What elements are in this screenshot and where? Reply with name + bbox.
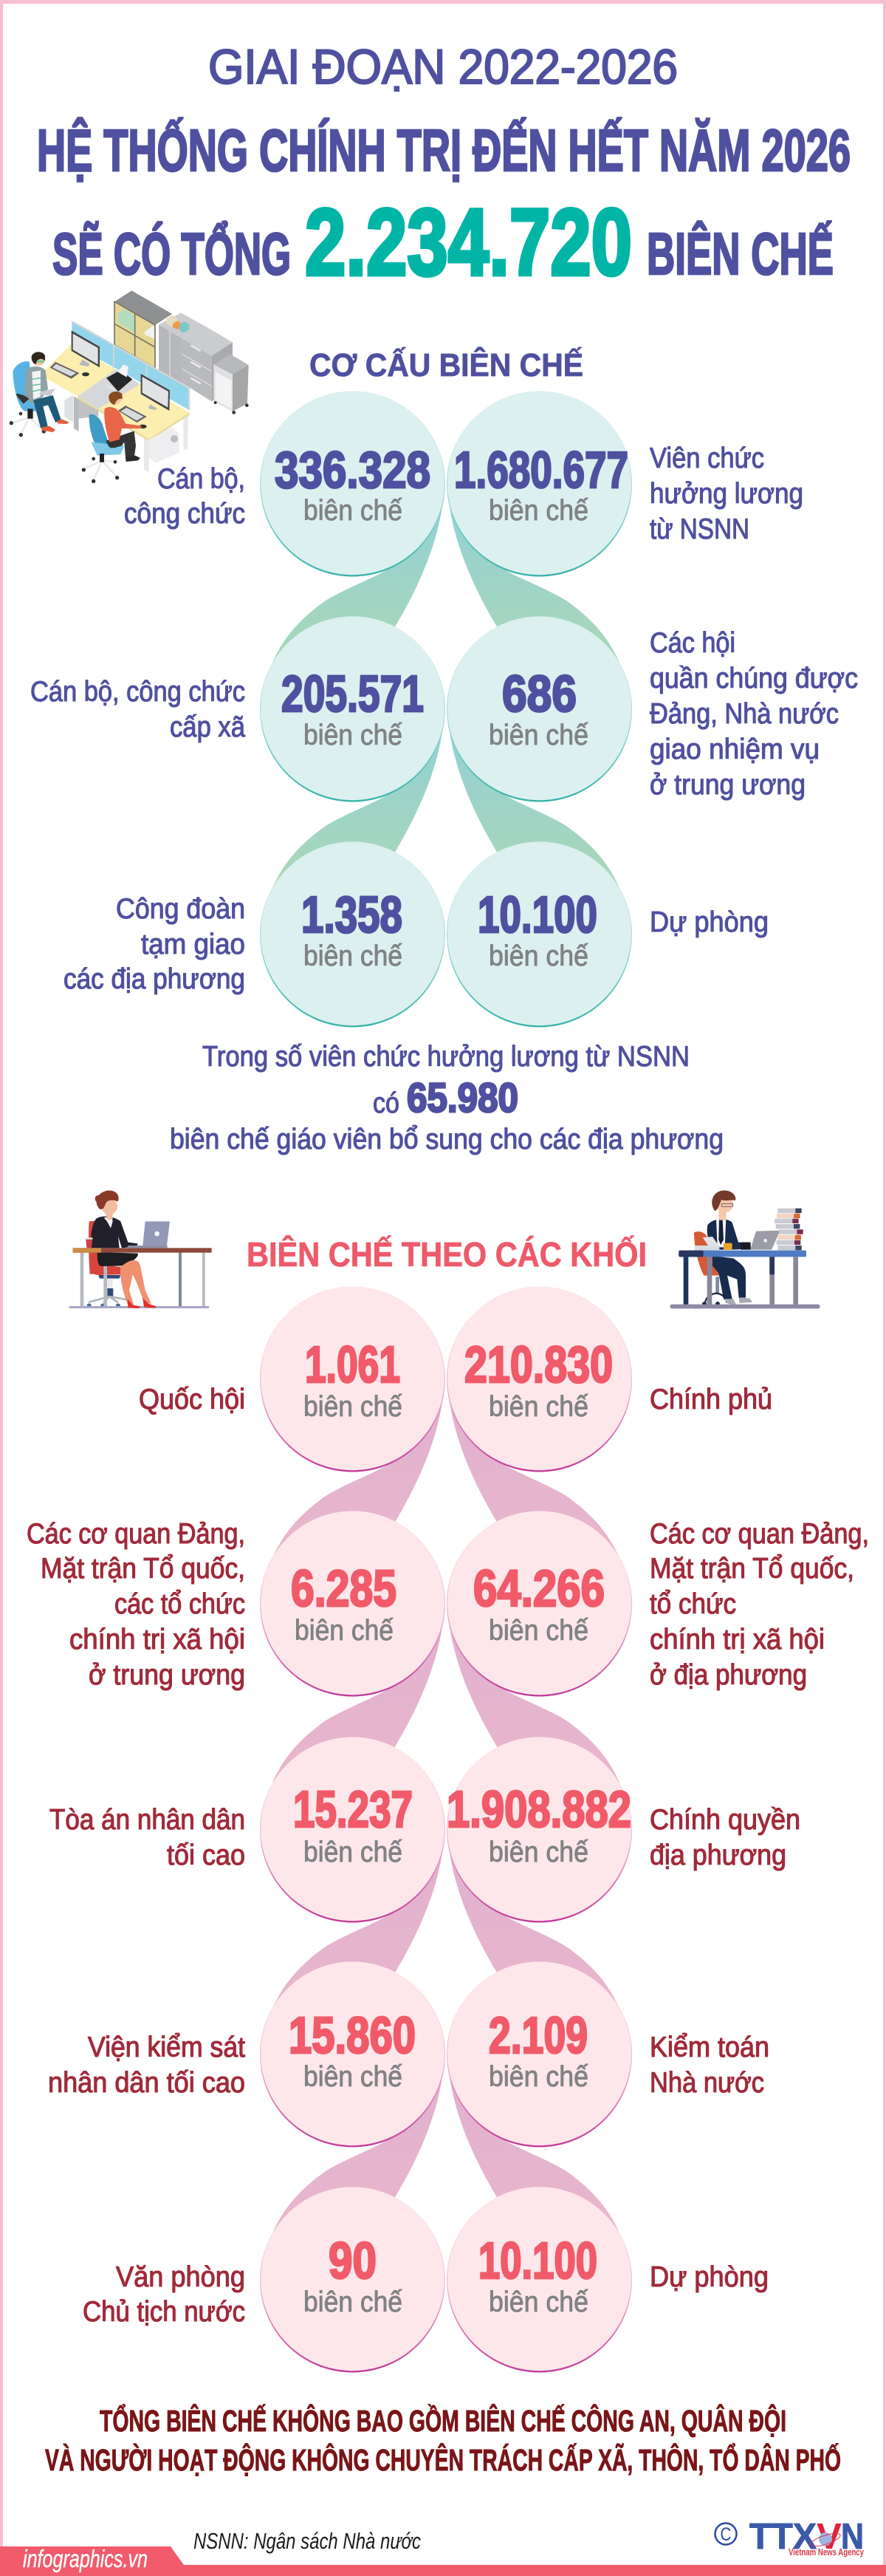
logo: TTXVN: TTX [749, 2517, 817, 2557]
label: các cơ quan đảng ở địa phương: tổ chức [650, 1588, 736, 1620]
label: cán bộ, công chức cấp xã: Cán bộ, công chức [30, 676, 245, 708]
stat: 15.237 biên chế: biên chế [303, 1837, 402, 1868]
stat: 64.266 biên chế: biên chế [489, 1615, 588, 1647]
label: dự phòng: Dự phòng [650, 906, 769, 938]
stat: 336.328 biên chế: 336.328 [275, 441, 430, 499]
label: viên chức hưởng lương từ NSNN: hưởng lương [650, 478, 803, 510]
stat: 90 biên chế: 90 [329, 2232, 377, 2289]
label: tòa án nhân dân tối cao: Tòa án nhân dân [49, 1804, 245, 1836]
title: SẼ CÓ TỔNG [52, 221, 291, 287]
stat: 1.061 biên chế [260, 1286, 445, 1472]
label: quốc hội: Quốc hội [139, 1384, 245, 1415]
label: kiểm toán nhà nước [650, 2032, 769, 2099]
label: các hội quần chúng: Đảng, Nhà nước [650, 698, 839, 730]
label: kiểm toán nhà nước: Kiểm toán [650, 2032, 769, 2063]
stat: 205.571 biên chế: biên chế [303, 720, 402, 751]
note: giáo viên bổ sung: biên chế giáo viên bổ sung cho các địa phương [170, 1124, 724, 1155]
label: viện kiểm sát nhân dân tối cao [48, 2032, 245, 2099]
stat: 2.109 biên chế: 2.109 [489, 2006, 588, 2064]
note: giáo viên bổ sung: Trong số viên chức hưởng lương từ NSNN [202, 1041, 690, 1073]
stat: 6.285 biên chế [260, 1511, 445, 1696]
label: chính quyền địa phương: địa phương [650, 1839, 786, 1871]
stat: 336.328 biên chế [260, 391, 445, 576]
label: cán bộ, công chức [124, 463, 245, 530]
logo: TTXVN: V [817, 2517, 842, 2557]
stat: 210.830 biên chế: biên chế [489, 1391, 588, 1423]
label: cán bộ, công chức cấp xã: cấp xã [170, 711, 245, 743]
heading: cơ cấu biên chế: CƠ CẤU BIÊN CHẾ [309, 346, 583, 383]
icon: woman at desk [69, 1190, 212, 1308]
stat: 205.571 biên chế [260, 616, 445, 802]
label: các cơ quan đảng ở trung ương: ở trung ương [89, 1659, 245, 1691]
label: các cơ quan đảng ở trung ương: các tổ chức [114, 1588, 245, 1620]
stat: 10.100 biên chế [447, 841, 632, 1027]
stat: 336.328 biên chế: biên chế [303, 495, 402, 527]
label: công đoàn tạm giao: Công đoàn [116, 893, 245, 925]
stat: 10.100 biên chế: 10.100 [478, 886, 597, 943]
stat: 2.109 biên chế [447, 1961, 632, 2147]
stat: 15.237 biên chế: 15.237 [293, 1780, 413, 1838]
label: công đoàn tạm giao: các địa phương [63, 963, 245, 995]
stat: 15.860 biên chế: biên chế [303, 2061, 402, 2093]
label: các hội quần chúng: quần chúng được [650, 663, 858, 694]
label: các cơ quan đảng ở trung ương [27, 1518, 245, 1691]
stat: 1.061 biên chế: biên chế [303, 1391, 402, 1423]
label: văn phòng chủ tịch nước: Văn phòng [116, 2261, 245, 2293]
label: chính quyền địa phương: Chính quyền [650, 1804, 800, 1836]
stat: 1.358 biên chế [260, 841, 445, 1027]
stat: 686 biên chế [447, 616, 632, 802]
stat: 210.830 biên chế [447, 1286, 632, 1472]
note: giáo viên bổ sung [170, 1041, 724, 1155]
label: viên chức hưởng lương từ NSNN: Viên chức [650, 443, 764, 474]
stat: 2.109 biên chế: biên chế [489, 2061, 588, 2093]
label: viện kiểm sát nhân dân tối cao: nhân dân tối cao [48, 2067, 245, 2099]
stat: 686 biên chế: biên chế [489, 720, 588, 751]
label: văn phòng chủ tịch nước: Chủ tịch nước [83, 2296, 245, 2328]
stat: 10.100 biên chế (dự phòng) [447, 2187, 632, 2373]
abbreviation note: NSNN: Ngân sách Nhà nước [193, 2528, 421, 2554]
logo: TTXVN: C [721, 2524, 731, 2545]
logo: TTXVN: N [841, 2517, 864, 2557]
note: giáo viên bổ sung: 65.980 [407, 1074, 518, 1121]
title: 2.234.720 [305, 190, 632, 295]
stat: 6.285 biên chế: 6.285 [291, 1559, 396, 1617]
stat: 15.237 biên chế [260, 1737, 445, 1922]
label: các cơ quan đảng ở trung ương: chính trị xã hội [69, 1624, 245, 1656]
stat: 15.860 biên chế: 15.860 [289, 2006, 416, 2064]
label: các cơ quan đảng ở địa phương: ở địa phương [650, 1659, 807, 1691]
label: công đoàn tạm giao: tạm giao [141, 929, 245, 960]
label: cán bộ, công chức: công chức [124, 498, 245, 530]
stat: 90 biên chế: biên chế [303, 2286, 402, 2318]
footer note [45, 2403, 841, 2477]
stat: 1.358 biên chế: biên chế [303, 940, 402, 972]
label: các cơ quan đảng ở địa phương: Mặt trận Tổ quốc, [650, 1553, 854, 1585]
label: các cơ quan đảng ở trung ương: Mặt trận Tổ quốc, [41, 1553, 245, 1585]
stat: 1.908.882 biên chế: 1.908.882 [447, 1780, 631, 1838]
icon: isometric office illustration [10, 290, 249, 483]
stat: 1.680.677 biên chế [447, 391, 632, 576]
heading: biên chế theo các khối: BIÊN CHẾ THEO CÁC KHỐI [247, 1235, 647, 1274]
title: GIAI ĐOẠN 2022-2026 [208, 39, 678, 94]
stat: 10.100 biên chế: biên chế [489, 940, 588, 972]
label: các cơ quan đảng ở địa phương: chính trị xã hội [650, 1624, 825, 1656]
label: dự phòng: Dự phòng [650, 2261, 769, 2293]
stat: 1.908.882 biên chế [447, 1737, 632, 1922]
stat: 1.680.677 biên chế: 1.680.677 [454, 441, 628, 499]
label: các hội quần chúng: Các hội [650, 627, 735, 659]
label: cán bộ, công chức cấp xã [30, 676, 245, 743]
stat: 1.908.882 biên chế: biên chế [489, 1837, 588, 1868]
label: cán bộ, công chức: Cán bộ, [157, 463, 245, 495]
label: các cơ quan đảng ở địa phương [650, 1518, 869, 1691]
label: tòa án nhân dân tối cao: tối cao [167, 1839, 245, 1871]
stat: 64.266 biên chế [447, 1511, 632, 1696]
logo: TTXVN [715, 2517, 865, 2558]
connectors: teal ribbons [272, 480, 619, 890]
stat: 686 biên chế: 686 [502, 665, 577, 722]
label: kiểm toán nhà nước: Nhà nước [650, 2067, 764, 2099]
label: các cơ quan đảng ở trung ương: Các cơ quan Đảng, [27, 1518, 245, 1550]
stat: 64.266 biên chế: 64.266 [473, 1559, 605, 1617]
title [37, 39, 851, 295]
label: các hội quần chúng: ở trung ương [650, 769, 806, 801]
label: viện kiểm sát nhân dân tối cao: Viện kiểm sát [88, 2032, 245, 2063]
note: giáo viên bổ sung: có [373, 1087, 399, 1119]
footer band with site name [0, 2545, 886, 2576]
stat: 15.860 biên chế [260, 1961, 445, 2147]
stat: 1.680.677 biên chế: biên chế [489, 495, 588, 527]
stat: 1.061 biên chế: 1.061 [305, 1336, 400, 1393]
stat: 6.285 biên chế: biên chế [295, 1615, 394, 1647]
label: công đoàn tạm giao [63, 893, 245, 995]
label: các hội quần chúng: giao nhiệm vụ [650, 734, 820, 765]
connectors: pink ribbons [272, 1376, 619, 2235]
icon: man at desk [670, 1190, 820, 1308]
label: chính quyền địa phương [650, 1804, 800, 1871]
label: viên chức hưởng lương từ NSNN [650, 443, 803, 545]
stat: 10.100 biên chế (dự phòng): biên chế [489, 2286, 588, 2318]
label: văn phòng chủ tịch nước [83, 2261, 245, 2328]
stat: 205.571 biên chế: 205.571 [281, 665, 424, 722]
label: viên chức hưởng lương từ NSNN: từ NSNN [650, 513, 749, 545]
label: tòa án nhân dân tối cao [49, 1804, 245, 1871]
stat: 90 biên chế [260, 2187, 445, 2373]
label: chính phủ: Chính phủ [650, 1384, 772, 1415]
label: các hội quần chúng [650, 627, 858, 801]
stat: 10.100 biên chế (dự phòng): 10.100 [478, 2232, 597, 2289]
stat: 210.830 biên chế: 210.830 [464, 1336, 613, 1393]
stat: 1.358 biên chế: 1.358 [301, 886, 402, 943]
footer band with site name: infographics.vn [23, 2545, 148, 2572]
